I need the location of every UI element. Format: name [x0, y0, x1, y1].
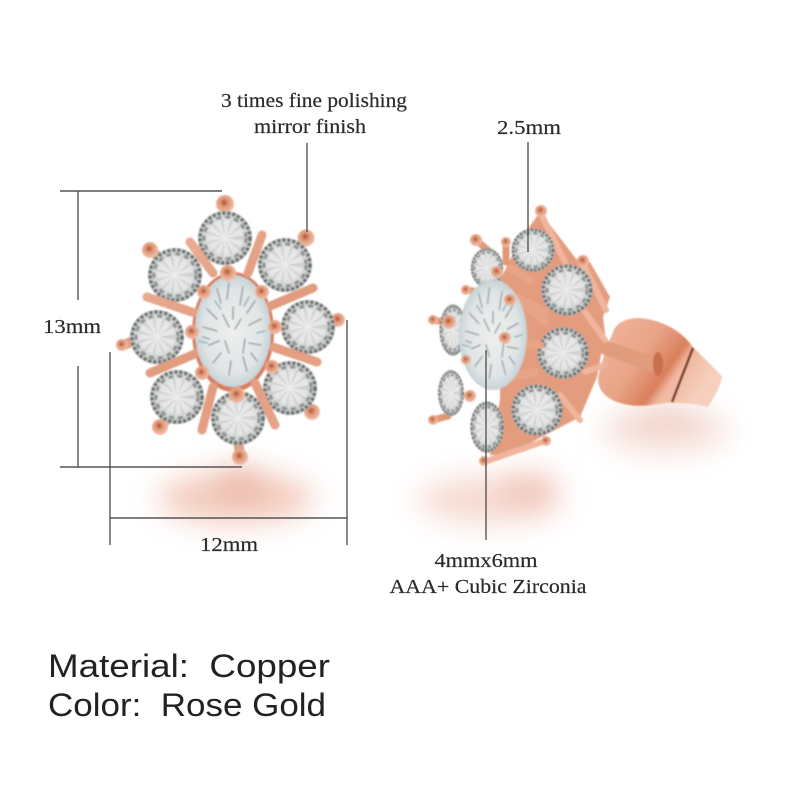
label: 12mm: 12mm [200, 534, 258, 556]
rose gold bars [147, 235, 317, 430]
center marquise stone [195, 275, 271, 387]
label: polishing [221, 90, 407, 138]
label: 2.5mm: 2.5mm [497, 117, 561, 139]
side center stone [459, 280, 527, 390]
center prong tips [185, 265, 282, 403]
outer zirconia stones [130, 211, 335, 445]
side front prongs [442, 266, 516, 402]
post [596, 338, 663, 376]
label: polishing: 3 times fine polishing [221, 90, 407, 112]
label: stone size [390, 550, 586, 598]
side inner prongs [508, 268, 545, 378]
label: polishing: mirror finish [254, 116, 366, 138]
label: stone size: 4mmx6mm [434, 550, 538, 572]
butterfly clutch back [598, 318, 722, 407]
reflection shadows [158, 406, 729, 524]
label: 13mm: 13mm [43, 316, 101, 338]
rear setting [428, 205, 610, 466]
side stones [438, 228, 593, 453]
earring: side view [428, 205, 722, 466]
dimension lines [60, 142, 528, 545]
label: stone size: AAA+ Cubic Zirconia [390, 576, 586, 598]
earring: front view [116, 195, 345, 465]
color line: Color: Rose Gold [48, 687, 326, 723]
material line: Material: Copper [48, 648, 330, 684]
outer prongs [116, 195, 345, 465]
